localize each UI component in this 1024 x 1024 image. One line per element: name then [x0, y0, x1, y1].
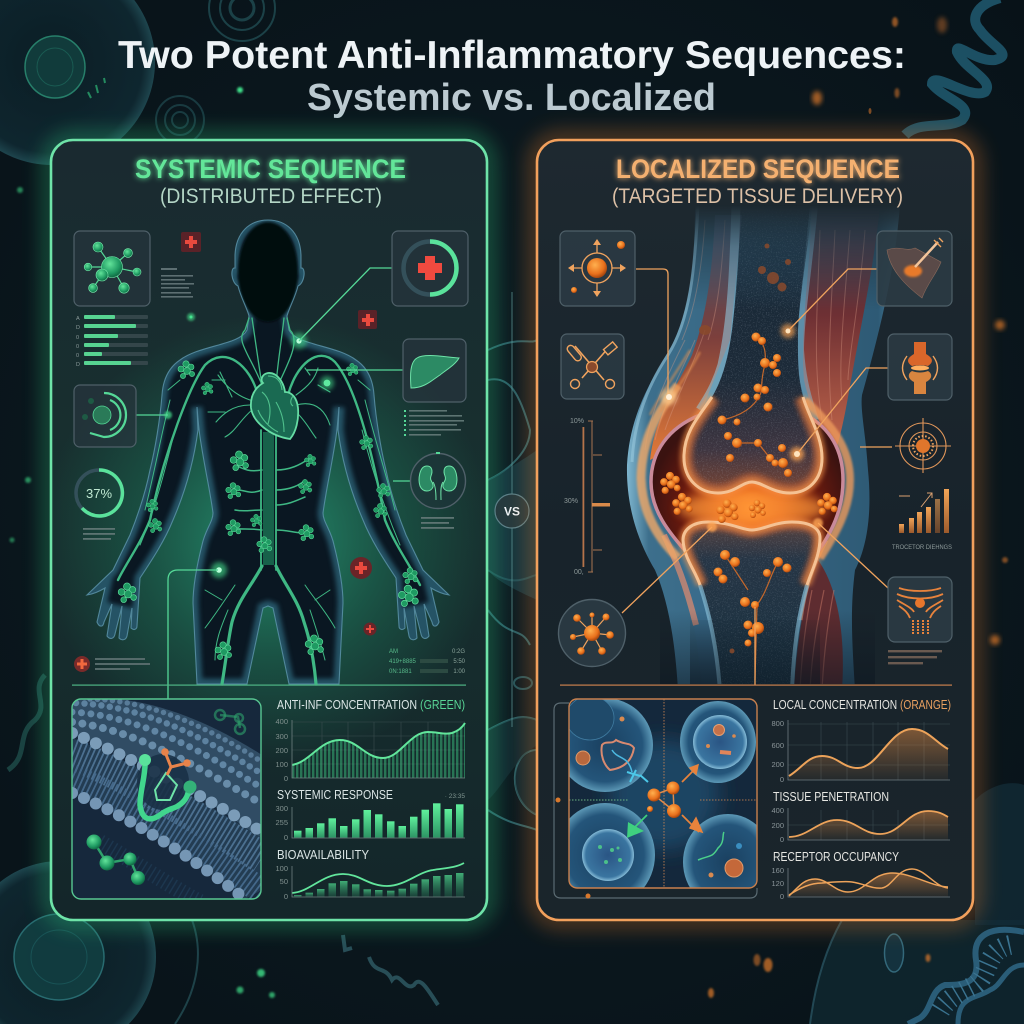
stat bars: D — [76, 362, 80, 368]
chart: tissue penetration: 0 — [780, 835, 784, 844]
chart: tissue penetration — [771, 789, 950, 844]
tibia — [680, 520, 825, 690]
icon: target reticle — [895, 418, 951, 473]
chart: systemic response: 300 — [275, 804, 288, 813]
chart: anti-inf concentration: 200 — [275, 746, 288, 755]
stat bars: 0 — [76, 344, 79, 350]
text lines beside cross — [95, 658, 150, 670]
text block lines — [404, 410, 464, 436]
heading: localized sequence: LOCALIZED SEQUENCE — [616, 154, 900, 184]
chart: bioavailability: 0 — [284, 892, 288, 901]
heading: systemic sequence — [135, 154, 406, 208]
title: Systemic vs. Localized — [307, 77, 716, 119]
data table: 0:2G — [452, 649, 465, 655]
gauge: 37% — [76, 470, 122, 516]
glowing nodes — [164, 313, 334, 578]
text lines under receptor card — [888, 650, 942, 664]
vertical scale gauge — [564, 418, 610, 576]
chart: receptor occupancy: 0 — [780, 892, 784, 901]
knee joint anatomy — [627, 205, 900, 690]
icon: red cross badge — [181, 232, 201, 252]
card: liver — [403, 339, 466, 402]
chart: bioavailability: BIOAVAILABILITY — [277, 847, 369, 862]
data table: AM — [389, 649, 398, 655]
chart: anti-inf concentration: 400 — [275, 717, 288, 726]
chart: local concentration: 800 — [771, 719, 784, 728]
chart: bioavailability: 50 — [280, 877, 288, 886]
stat bars — [76, 315, 148, 368]
chart: anti-inf concentration: ANTI-INF CONCENTRATION (GREEN) — [277, 697, 465, 712]
chart: receptor occupancy — [771, 849, 950, 901]
text lines under kidneys — [421, 517, 454, 529]
card: diffusion icon — [560, 231, 635, 306]
glowing nodes — [661, 324, 823, 532]
chart: tissue penetration: 400 — [771, 806, 784, 815]
chart: systemic response — [275, 787, 465, 842]
chart: local concentration: 0 — [780, 775, 784, 784]
joint capsule and fluid — [641, 350, 850, 558]
card: medical gauge — [392, 231, 468, 306]
connector lines: systemic — [136, 268, 410, 699]
orange molecules — [660, 244, 838, 680]
heading: localized sequence: (TARGETED TISSUE DELIVERY) — [612, 185, 903, 208]
chart: anti-inf concentration: 300 — [275, 732, 288, 741]
stat bars: D — [76, 325, 80, 331]
lymph node clusters — [118, 361, 418, 660]
divider — [72, 684, 466, 686]
chart: anti-inf concentration: 0 — [284, 774, 288, 783]
chart: anti-inf concentration: 100 — [275, 760, 288, 769]
connector lines: localized — [622, 269, 892, 685]
heading: localized sequence — [612, 154, 903, 208]
card: receptor structure — [888, 577, 952, 642]
chart: systemic response: · 23:35 — [445, 793, 465, 800]
red cross markers — [74, 557, 376, 672]
chart: anti-inf concentration — [275, 697, 465, 783]
icon: red cross badge — [358, 310, 377, 329]
chart: tissue penetration: TISSUE PENETRATION — [773, 789, 889, 804]
mini bar chart — [892, 489, 953, 551]
card: cell with arc gauge — [74, 385, 136, 447]
chart: local concentration — [771, 697, 951, 784]
femur — [680, 205, 825, 497]
data table: 1:00 — [453, 669, 466, 675]
gauge: 37%: 37% — [86, 486, 112, 501]
chart: local concentration: 600 — [771, 741, 784, 750]
inset: cell receptors — [553, 698, 758, 899]
title — [118, 34, 906, 119]
vertical scale gauge: 10% — [570, 418, 584, 425]
chart: bioavailability: 100 — [275, 864, 288, 873]
icon: molecule circle — [558, 600, 626, 666]
panel frame: systemic — [51, 140, 487, 920]
card: molecular scissors — [561, 334, 624, 399]
mini bar chart: TROCETOR DIEHNGS — [892, 544, 953, 551]
card: syringe in tissue — [877, 231, 952, 306]
divider — [560, 684, 952, 686]
title: Two Potent Anti-Inflammatory Sequences: — [118, 34, 906, 77]
text block lines — [161, 268, 194, 298]
chart: receptor occupancy: 160 — [771, 866, 784, 875]
card: molecule icon — [74, 231, 150, 306]
heading: systemic sequence: (DISTRIBUTED EFFECT) — [160, 185, 382, 208]
panel frame: localized — [537, 140, 973, 920]
data table: 0N:1881 — [389, 669, 412, 675]
data table: 5:50 — [453, 659, 466, 665]
card: joint icon — [888, 334, 952, 400]
chart: systemic response: 0 — [284, 833, 288, 842]
vertical scale gauge: 30% — [564, 498, 578, 505]
panel: systemic sequence — [51, 140, 487, 920]
chart: systemic response: SYSTEMIC RESPONSE — [277, 787, 393, 802]
vertical scale gauge: 00, — [574, 569, 584, 576]
chart: receptor occupancy: 120 — [771, 879, 784, 888]
stat bars: A — [76, 316, 80, 322]
heading: systemic sequence: SYSTEMIC SEQUENCE — [135, 154, 406, 184]
human body silhouette — [87, 220, 449, 684]
inset: cell membrane and receptor — [72, 698, 262, 902]
muscle bundles — [632, 205, 880, 690]
chart: bioavailability — [275, 847, 465, 901]
chart: local concentration: LOCAL CONCENTRATION (ORANGE) — [773, 697, 951, 712]
chart: receptor occupancy: RECEPTOR OCCUPANCY — [773, 849, 899, 864]
data table: 419+8885 — [389, 659, 417, 665]
icon: kidneys — [410, 452, 466, 508]
outer tissue — [627, 205, 900, 690]
stat bars: 0 — [76, 335, 79, 341]
icon: heart — [251, 373, 298, 439]
text lines under gauge — [83, 528, 115, 540]
stat bars: 0 — [76, 353, 79, 359]
chart: systemic response: 255 — [275, 818, 288, 827]
vascular network — [118, 318, 420, 684]
panel: localized sequence — [537, 140, 973, 920]
divider and VS badge — [495, 292, 529, 727]
data table — [389, 649, 466, 675]
chart: tissue penetration: 200 — [771, 821, 784, 830]
divider and VS badge: VS — [504, 504, 520, 518]
chart: local concentration: 200 — [771, 760, 784, 769]
